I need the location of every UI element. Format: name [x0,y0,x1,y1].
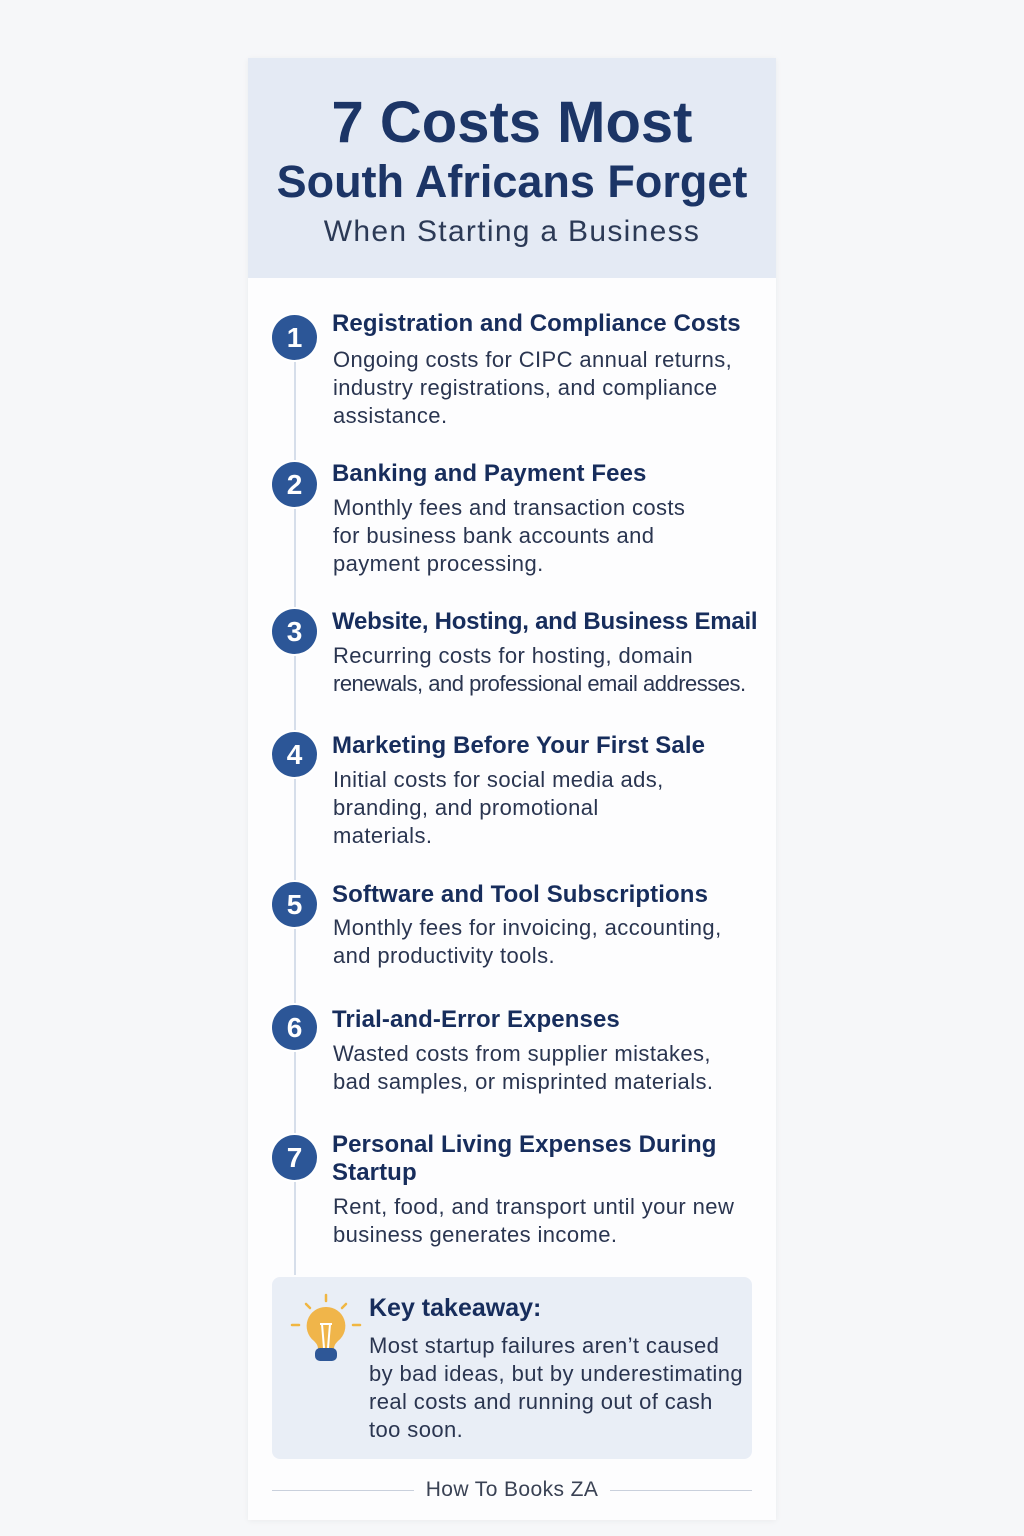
text: Ongoing costs for CIPC annual returns, [333,347,732,372]
text: 7 [287,1142,302,1173]
text: 5 [287,889,302,920]
text: Recurring costs for hosting, domain [333,643,693,668]
text: Software and Tool Subscriptions [332,881,708,908]
footer text: How To Books ZA [426,1478,598,1501]
text: Initial costs for social media ads, [333,767,664,792]
text: for business bank accounts and [333,523,654,548]
item 6 [272,1003,713,1094]
text: renewals, and professional email addresses. [333,671,746,696]
text: 3 [287,616,302,647]
text: Monthly fees for invoicing, accounting, [333,915,722,940]
text: business generates income. [333,1222,617,1247]
text: bad samples, or misprinted materials. [333,1069,713,1094]
callout heading: Key takeaway: [369,1294,541,1322]
text: Registration and Compliance Costs [332,310,741,337]
text: Wasted costs from supplier mistakes, [333,1041,711,1066]
icon: lightbulb [290,1294,362,1361]
text: industry registrations, and compliance [333,375,718,400]
text: branding, and promotional [333,795,599,820]
text: Banking and Payment Fees [332,460,646,487]
callout: key takeaway [272,1277,752,1459]
item 4 [272,730,705,848]
text: Startup [332,1159,417,1186]
text: Marketing Before Your First Sale [332,732,705,759]
text: assistance. [333,403,447,428]
callout text: by bad ideas, but by underestimating [369,1361,743,1386]
text: 2 [287,469,302,500]
callout text [369,1333,743,1442]
item 5 [272,880,722,968]
text: Personal Living Expenses During [332,1131,717,1158]
callout text: real costs and running out of cash [369,1389,713,1414]
text: Website, Hosting, and Business Email [332,608,757,635]
text: payment processing. [333,551,544,576]
callout text: too soon. [369,1417,463,1442]
item 7 [272,1131,734,1247]
text: materials. [333,823,432,848]
title line 2: South Africans Forget [277,156,747,207]
text: Rent, food, and transport until your new [333,1194,734,1219]
item 2 [272,460,685,576]
item 1 [272,310,741,428]
timeline line [294,337,296,1275]
text: Monthly fees and transaction costs [333,495,685,520]
title line 1: 7 Costs Most [332,90,692,155]
card [248,58,776,1520]
text: 1 [287,322,302,353]
subtitle: When Starting a Business [324,215,700,248]
header band [248,58,776,278]
text: and productivity tools. [333,943,555,968]
text: 4 [287,739,302,770]
item 3 [272,607,757,696]
text: Trial-and-Error Expenses [332,1006,620,1033]
callout text: Most startup failures aren’t caused [369,1333,719,1358]
text: 6 [287,1012,302,1043]
